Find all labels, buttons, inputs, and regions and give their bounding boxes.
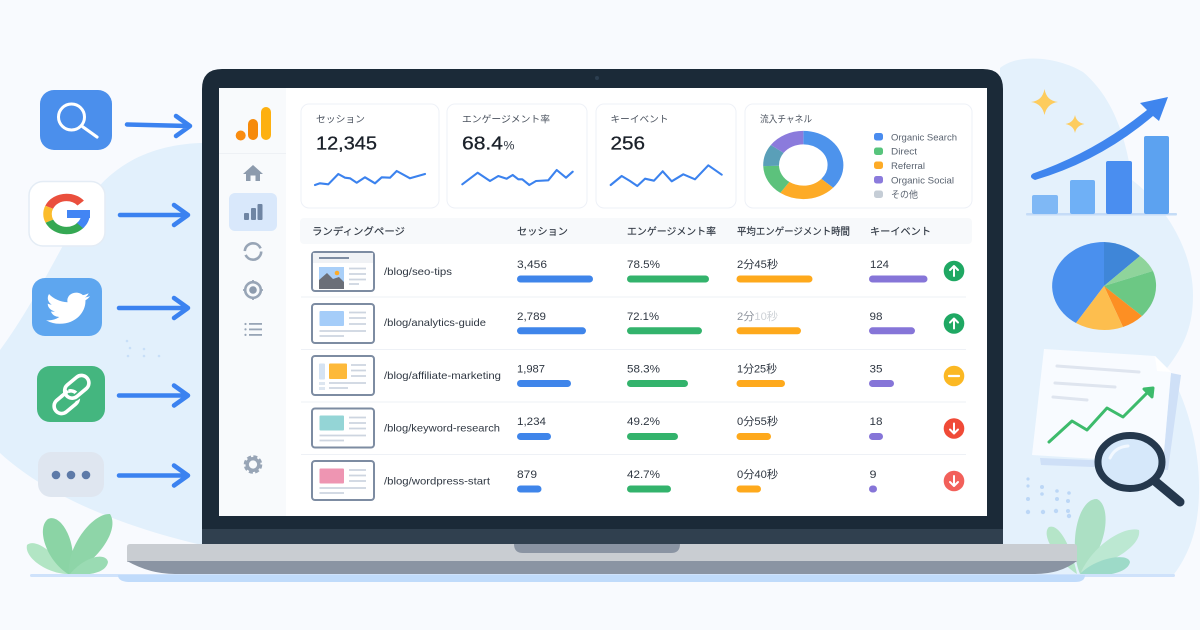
KPI card: engagement rate [447, 104, 587, 208]
KPI card: engagement rate: % [504, 140, 514, 152]
KPI card: sessions: 12,345 [316, 134, 377, 154]
plant right [1047, 499, 1139, 576]
decorative dots right [1026, 477, 1071, 518]
thumbnail [312, 252, 374, 291]
table row: seo-tips: /blog/seo-tips [384, 266, 452, 278]
source icon: link [37, 366, 105, 422]
table row: wordpress-start: 0分40秒 [737, 467, 778, 481]
laptop base shadow [118, 575, 1085, 582]
nav icon: home [243, 165, 263, 181]
analytics logo [236, 107, 271, 140]
table row: keyword-research: 18 [870, 416, 882, 428]
table row: seo-tips [312, 252, 964, 291]
table row: analytics-guide: 2,789 [517, 311, 546, 323]
table row: affiliate-marketing: /blog/affiliate-marketing [384, 370, 501, 382]
table row: affiliate-marketing: 58.3% [627, 364, 660, 376]
table row: affiliate-marketing: 1分25秒 [737, 362, 777, 376]
status down [944, 471, 964, 491]
background blob: left [0, 143, 215, 548]
status flat [944, 366, 964, 386]
arrow: Google to dashboard [120, 205, 188, 225]
legend: Organic Social [891, 176, 954, 186]
growth arrow [1031, 97, 1168, 180]
status up [944, 261, 964, 281]
nav icon: settings [245, 456, 261, 472]
table row: keyword-research [312, 408, 964, 448]
nav icon: reports active [229, 193, 277, 231]
arrow: search to dashboard [127, 116, 190, 136]
card: traffic channels: 流入チャネル [760, 114, 812, 126]
source icon: other [38, 452, 104, 497]
growth bar chart [1026, 136, 1177, 216]
table row: wordpress-start [312, 461, 964, 500]
KPI card: key events [596, 104, 736, 208]
table row: seo-tips: 3,456 [517, 259, 547, 271]
nav icon: cycle [245, 243, 261, 260]
table row: affiliate-marketing [312, 356, 964, 395]
table row: keyword-research: 0分55秒 [737, 414, 778, 428]
table row: seo-tips: 78.5% [627, 259, 660, 271]
KPI card: sessions [301, 104, 439, 208]
sparkles [1031, 89, 1084, 133]
table row: wordpress-start: 879 [517, 469, 537, 481]
source icon: Google [29, 182, 105, 246]
pie chart [1052, 242, 1156, 330]
thumbnail [312, 408, 374, 448]
laptop deck [127, 544, 1077, 562]
plant left [27, 514, 112, 575]
background blob: right [1000, 58, 1199, 577]
sidebar [219, 107, 286, 472]
table row: wordpress-start: 42.7% [627, 469, 660, 481]
thumbnail [312, 461, 374, 500]
legend: Direct [891, 147, 917, 158]
legend [874, 132, 957, 201]
table row: wordpress-start: 9 [870, 469, 876, 481]
table row: seo-tips: 2分45秒 [737, 257, 778, 271]
KPI card: key events: キーイベント [610, 114, 668, 126]
KPI card: engagement rate: エンゲージメント率 [462, 114, 550, 126]
legend: その他 [891, 189, 918, 201]
table row: analytics-guide: 2分10秒 [737, 309, 778, 323]
arrow: Twitter to dashboard [119, 298, 188, 318]
arrow: other to dashboard [119, 466, 188, 486]
thumbnail [312, 304, 374, 343]
table row: analytics-guide: /blog/analytics-guide [384, 317, 486, 329]
KPI card: engagement rate: 68.4 [462, 134, 503, 154]
table row: affiliate-marketing: 35 [870, 364, 882, 376]
report document [1032, 349, 1181, 470]
source icon: search [40, 90, 112, 150]
table header [300, 218, 972, 244]
decorative dots left [126, 340, 160, 357]
arrow: link to dashboard [119, 386, 188, 406]
source icon: Twitter [32, 278, 102, 336]
KPI card: key events: 256 [610, 134, 645, 154]
legend: Referral [891, 161, 925, 172]
ground line [30, 574, 1175, 577]
laptop lid [202, 69, 1003, 544]
magnifier [1098, 436, 1180, 502]
table header: セッション [517, 226, 568, 238]
status up [944, 313, 964, 334]
table row: analytics-guide: 98 [870, 311, 882, 323]
table row: analytics-guide [312, 304, 964, 343]
donut chart [771, 138, 836, 192]
table row: seo-tips: 124 [870, 259, 889, 271]
nav icon: target [243, 280, 263, 300]
legend: Organic Search [891, 132, 957, 143]
table header: エンゲージメント率 [627, 226, 716, 238]
KPI card: sessions: セッション [316, 114, 365, 126]
table row: analytics-guide: 72.1% [627, 311, 659, 323]
table row: keyword-research: /blog/keyword-research [384, 422, 500, 434]
table header: ランディングページ [312, 225, 405, 238]
table header: キーイベント [870, 226, 931, 238]
green trend line [1049, 388, 1153, 442]
table row: affiliate-marketing: 1,987 [517, 364, 545, 376]
table header: 平均エンゲージメント時間 [737, 225, 850, 238]
nav icon: list [244, 323, 262, 336]
table row: wordpress-start: /blog/wordpress-start [384, 476, 490, 488]
status down [944, 418, 964, 439]
card: traffic channels [745, 104, 972, 208]
thumbnail [312, 356, 374, 395]
screen [219, 88, 987, 516]
laptop [118, 69, 1085, 582]
table row: keyword-research: 1,234 [517, 416, 546, 428]
table row: keyword-research: 49.2% [627, 416, 660, 428]
